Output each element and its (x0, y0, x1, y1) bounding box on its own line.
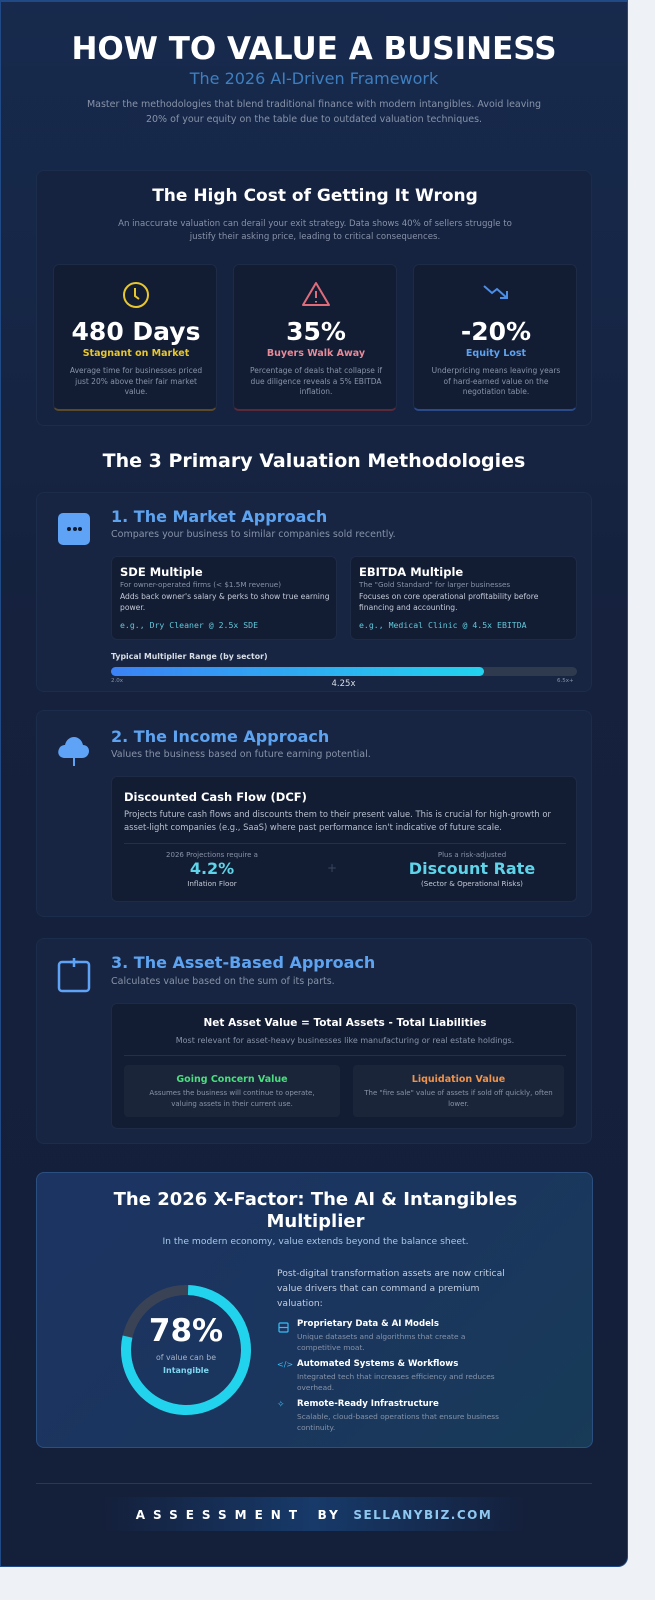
stat: discount rate (409, 851, 535, 888)
stat card: -20%: Equity Lost (466, 348, 526, 359)
heading: Multiplier (266, 1211, 364, 1232)
card: DCF: Discounted Cash Flow (DCF) (124, 790, 307, 804)
panel: high cost (36, 170, 592, 426)
bar chart: multiplier range: 6.5x+ (557, 678, 574, 684)
item: data: Proprietary Data & AI Models (297, 1319, 439, 1329)
text block: Post-digital transformation assets are now critical value drivers that can command a premium valuation: (277, 1268, 505, 1309)
text block: An inaccurate valuation can derail your exit strategy. Data shows 40% of sellers struggle to justify their asking price, leading to critical consequences. (118, 219, 512, 242)
box: going concern (124, 1065, 340, 1117)
stat card: 480 days: Stagnant on Market (83, 348, 189, 359)
box: going concern: Going Concern Value (176, 1074, 288, 1085)
stat card: -20% (413, 264, 577, 411)
icon: cloud tree (58, 737, 89, 766)
bar chart: multiplier range: 2.0x (111, 678, 123, 684)
card: EBITDA: Focuses on core operational profitability before financing and accounting. (359, 592, 538, 612)
stat: inflation: Inflation Floor (187, 879, 237, 888)
card: SDE: SDE Multiple (120, 565, 203, 579)
panel: asset approach (36, 938, 592, 1144)
bar chart: multiplier range: Typical Multiplier Range (by sector) (111, 652, 268, 661)
panel: x-factor (36, 1172, 593, 1448)
box: liquidation: Liquidation Value (412, 1074, 505, 1085)
item: automation: Integrated tech that increases efficiency and reduces overhead. (297, 1372, 495, 1392)
bar chart: multiplier range: 4.25x (332, 679, 355, 689)
card: EBITDA (350, 556, 577, 640)
subtitle: The 2026 AI-Driven Framework (190, 69, 438, 88)
icon: market (58, 513, 90, 545)
title: HOW TO VALUE A BUSINESS (71, 31, 557, 67)
item: automation: Automated Systems & Workflows (297, 1359, 458, 1369)
item: infrastructure: Scalable, cloud-based operations that ensure business continuity. (297, 1412, 499, 1432)
stat card: 35%: Percentage of deals that collapse if due diligence reveals a 5% EBITDA inflation. (250, 366, 382, 396)
panel: x-factor: In the modern economy, value extends beyond the balance sheet. (162, 1236, 469, 1247)
card: SDE (111, 556, 337, 640)
stat: inflation: 2026 Projections require a (166, 851, 258, 859)
item: infrastructure (277, 1399, 499, 1432)
card: NAV: Most relevant for asset-heavy businesses like manufacturing or real estate holdings. (176, 1036, 514, 1045)
stat: discount rate: (Sector & Operational Risks) (421, 879, 523, 888)
footer: ASSESSMENT BY SELLANYBIZ.COM (136, 1508, 492, 1522)
heading (114, 1189, 517, 1232)
card: DCF (111, 776, 577, 902)
stat: inflation: 4.2% (190, 859, 234, 878)
stat card: 480 days: Average time for businesses priced just 20% above their fair market value. (70, 366, 202, 396)
chart: donut 78%: of value can be (156, 1353, 216, 1362)
icon: warning (302, 282, 330, 306)
heading: 2. The Income Approach (111, 727, 329, 746)
stat card: -20%: Underpricing means leaving years of hard-earned value on the negotiation table. (432, 366, 560, 396)
panel: market approach (36, 492, 592, 692)
intro text: Master the methodologies that blend traditional finance with modern intangibles. Avoid leaving 20% of your equity on the table due to outdated valuation techniques. (87, 99, 541, 125)
panel: market approach: Compares your business to similar companies sold recently. (111, 529, 396, 540)
panel: income approach (36, 710, 592, 917)
stat card: 480 days: 480 Days (72, 317, 200, 346)
stat: discount rate: Discount Rate (409, 859, 535, 878)
stat card: 35% (233, 264, 397, 411)
box: liquidation (353, 1065, 564, 1117)
bar chart: multiplier range (111, 652, 577, 689)
panel: income approach: Values the business based on future earning potential. (111, 749, 371, 760)
item: automation (277, 1359, 495, 1392)
card: EBITDA: The "Gold Standard" for larger businesses (359, 580, 510, 589)
chart: donut 78% (121, 1285, 251, 1415)
item: data (278, 1319, 465, 1352)
box: liquidation: The "fire sale" value of assets if sold off quickly, often lower. (364, 1089, 553, 1108)
card: NAV (111, 1003, 577, 1129)
item: data: Unique datasets and algorithms that create a competitive moat. (297, 1332, 465, 1352)
panel: asset approach: Calculates value based on the sum of its parts. (111, 976, 335, 987)
card: SDE: For owner-operated firms (< $1.5M revenue) (120, 580, 281, 589)
card: SDE: e.g., Dry Cleaner @ 2.5x SDE (120, 620, 258, 630)
stat card: 35%: Buyers Walk Away (267, 348, 365, 359)
section heading: The 3 Primary Valuation Methodologies (103, 450, 525, 472)
card: SDE: Adds back owner's salary & perks to show true earning power. (120, 592, 330, 612)
footer (100, 1497, 528, 1531)
card: NAV: Net Asset Value = Total Assets - Total Liabilities (204, 1017, 486, 1029)
icon: clipboard (58, 958, 90, 992)
card: DCF: + (327, 861, 337, 875)
heading: 3. The Asset-Based Approach (111, 953, 375, 972)
stat: discount rate: Plus a risk-adjusted (438, 851, 506, 859)
card: DCF: Projects future cash flows and discounts them to their present value. This is crucial for high-growth or asset-light companies (e.g., SaaS) where past performance isn't indicative of future scale. (124, 809, 551, 832)
icon: trending down (483, 285, 508, 299)
stat card: 480 days (53, 264, 217, 411)
heading: 1. The Market Approach (111, 507, 327, 526)
box: going concern: Assumes the business will continue to operate, valuing assets in their current use. (149, 1089, 315, 1108)
icon: clock (123, 282, 149, 308)
item: infrastructure: Remote-Ready Infrastructure (297, 1399, 439, 1409)
item: infrastructure: ✧ (277, 1400, 285, 1410)
item: automation: </> (277, 1360, 293, 1369)
stat card: -20%: -20% (461, 317, 531, 346)
card: EBITDA: e.g., Medical Clinic @ 4.5x EBITDA (359, 620, 527, 630)
stat card: 35%: 35% (286, 317, 346, 346)
heading: The 2026 X-Factor: The AI & Intangibles (114, 1189, 517, 1210)
chart: donut 78%: Intangible (163, 1366, 209, 1375)
stat: inflation (166, 851, 258, 888)
heading: The High Cost of Getting It Wrong (152, 186, 478, 206)
card: EBITDA: EBITDA Multiple (359, 565, 463, 579)
chart: donut 78%: 78% (149, 1313, 223, 1349)
